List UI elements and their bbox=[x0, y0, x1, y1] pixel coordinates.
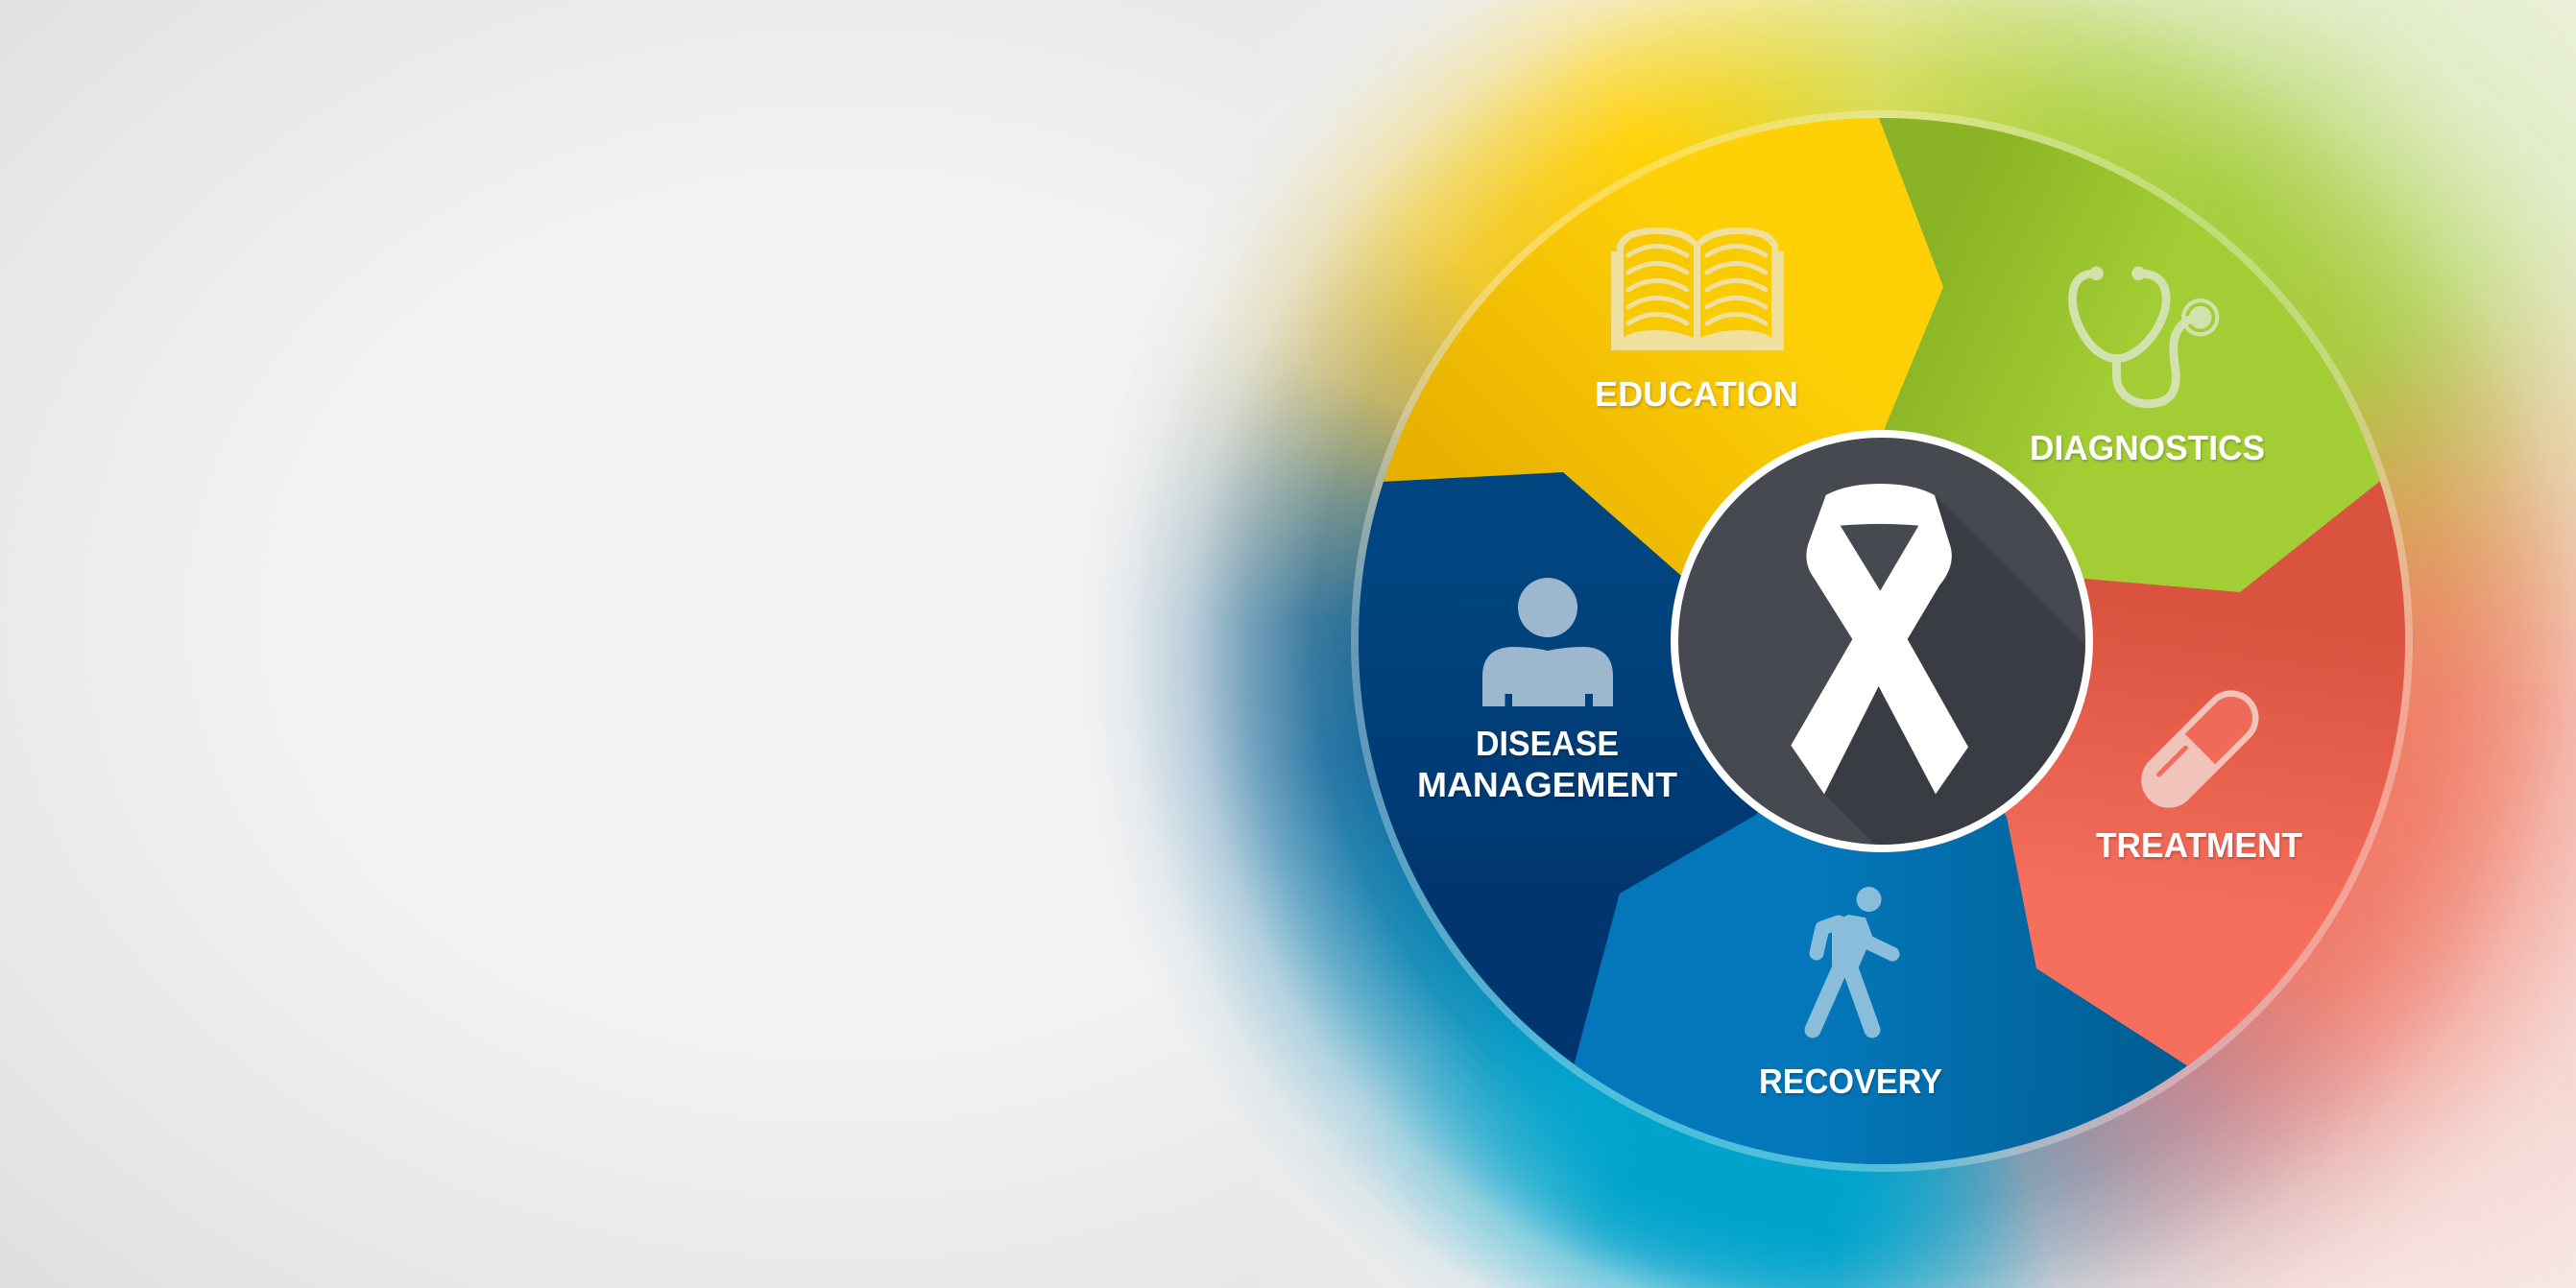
label: diagnostics: DIAGNOSTICS bbox=[2030, 428, 2265, 467]
icon: open book bbox=[1611, 227, 1784, 350]
colour glow: pale green and red to the right bbox=[1968, 0, 2576, 1288]
label: disease management: DISEASE bbox=[1476, 724, 1619, 763]
wheel segments bbox=[1359, 118, 2405, 1164]
long shadow bbox=[1824, 496, 2085, 845]
segment: diagnostics bbox=[1879, 118, 2380, 592]
label: disease management: MANAGEMENT bbox=[1417, 765, 1677, 804]
colour glow: ring around wheel bbox=[1106, 0, 2576, 1288]
segment: education bbox=[1384, 118, 1943, 576]
segment: disease management bbox=[1359, 472, 1758, 1064]
colour glow: teal at the bottom bbox=[1389, 1062, 2038, 1288]
segment: treatment bbox=[2005, 481, 2405, 1065]
icon: walking person bbox=[1813, 887, 1892, 1030]
label: education: EDUCATION bbox=[1595, 374, 1798, 414]
centre badge bbox=[1671, 430, 2093, 852]
segment: recovery bbox=[1575, 812, 2187, 1164]
label: treatment: TREATMENT bbox=[2096, 825, 2302, 865]
label: recovery: RECOVERY bbox=[1759, 1061, 1942, 1101]
wheel outer ring bbox=[1355, 114, 2409, 1168]
icon: pill capsule bbox=[2130, 679, 2270, 820]
wheel bbox=[1351, 110, 2413, 1172]
label: disease management bbox=[1417, 724, 1677, 804]
icon: stethoscope bbox=[2073, 267, 2217, 404]
icon: awareness ribbon bbox=[1791, 484, 1968, 794]
icon: person bust bbox=[1482, 578, 1613, 706]
